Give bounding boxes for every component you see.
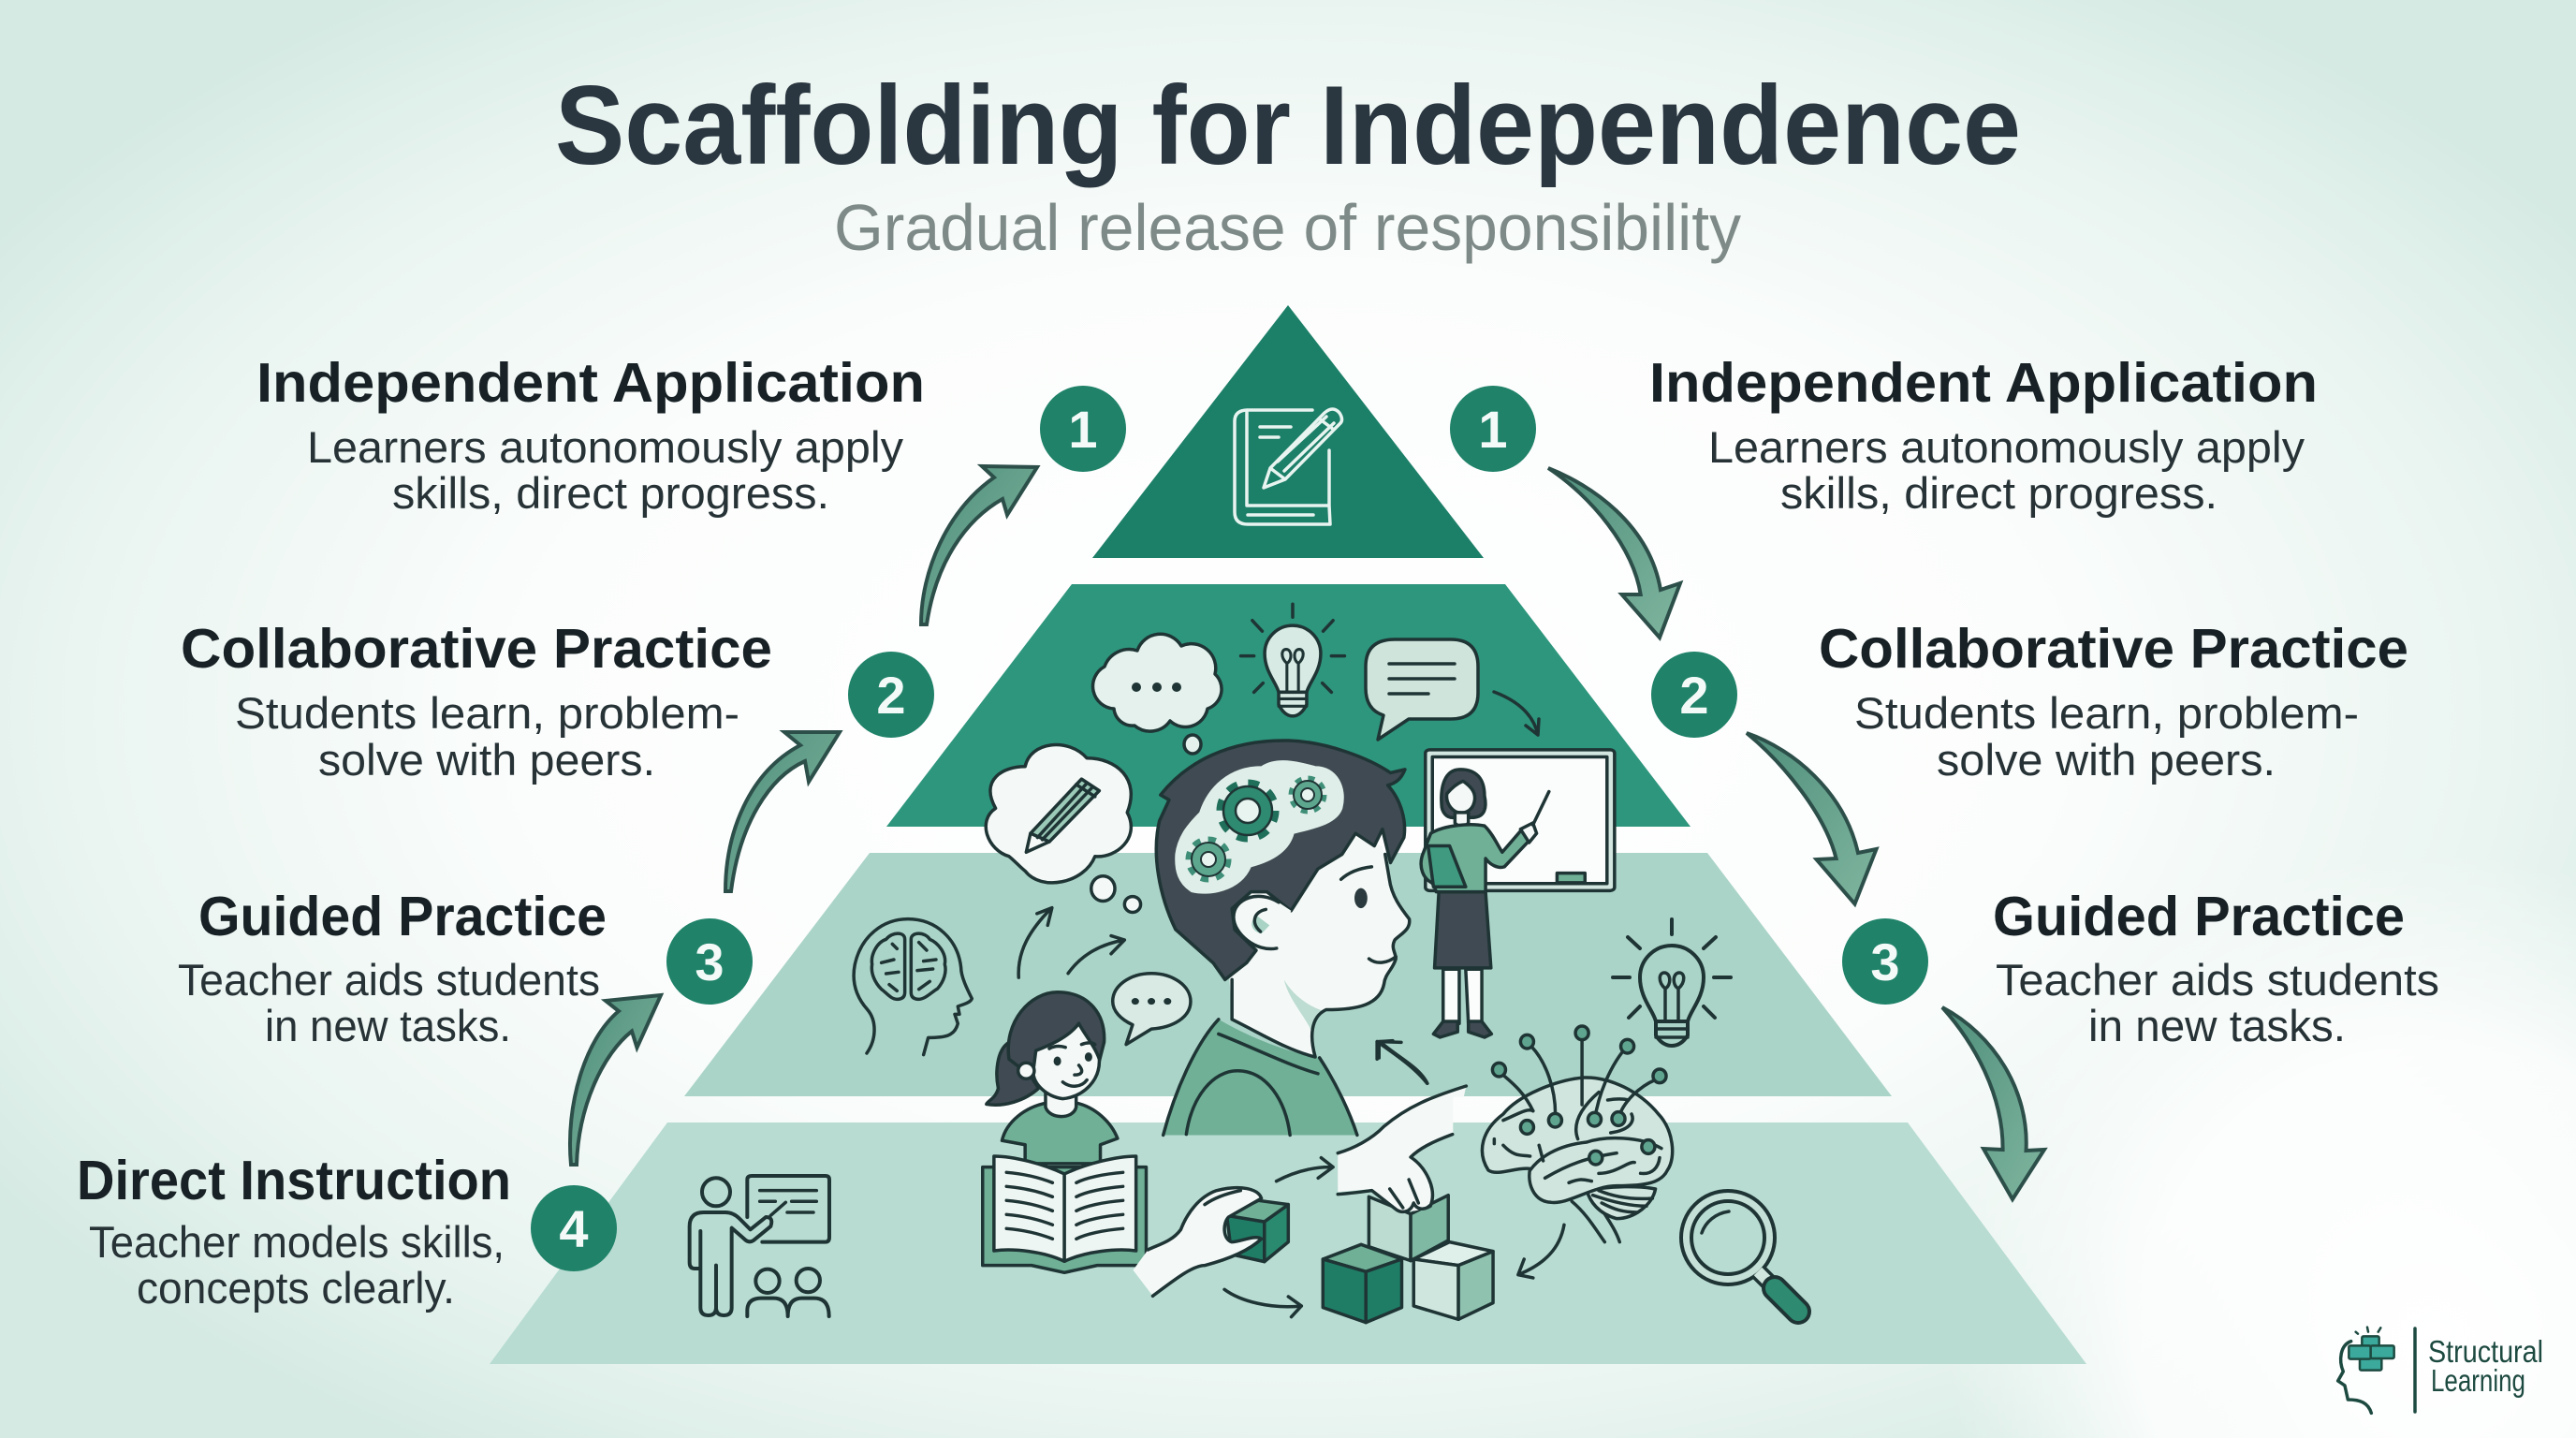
illustration: girl reading: [987, 992, 1118, 1164]
icon: speech bubble with lines: [1366, 639, 1478, 740]
number badge: 4: [531, 1185, 617, 1271]
pyramid: [490, 305, 2086, 1364]
number badge: left 3: [666, 918, 753, 1005]
icon: teacher with students: [690, 1176, 829, 1316]
title: Scaffolding for Independence: [555, 63, 2021, 188]
scene traced group: [986, 741, 1615, 1164]
icon: lower gear: [1189, 840, 1228, 879]
illustration: whiteboard: [1426, 750, 1615, 890]
illustration: held block: [1227, 1200, 1288, 1262]
number badge: 4: 4: [559, 1199, 589, 1258]
left label: guided practice: Guided Practice: [198, 886, 607, 947]
left label: direct instruction: Direct Instruction: [77, 1150, 511, 1211]
icon: large gear: [1221, 784, 1275, 838]
number badge: right 2: [1651, 652, 1737, 738]
number badge: left 1: [1040, 386, 1126, 472]
illustration: boy with gears in head: [1156, 741, 1410, 1135]
right label: guided practice: in new tasks.: [2088, 1001, 2346, 1050]
left label: independent application: [256, 352, 925, 518]
right label: collaborative practice: Students learn, problem-: [1854, 688, 2359, 738]
left label: direct instruction: [77, 1150, 511, 1313]
icon: small speech bubble: [1113, 974, 1191, 1045]
number badge: right 3: 3: [1870, 932, 1900, 991]
tier 1: independent application: [1092, 305, 1484, 558]
subtitle: Gradual release of responsibility: [834, 191, 1741, 264]
illustration: stacked blocks: [1323, 1196, 1493, 1323]
right label: guided practice: Guided Practice: [1993, 886, 2405, 947]
icon: magnifying glass: [1681, 1191, 1798, 1312]
arrow: flow to thought cloud: [1018, 908, 1052, 977]
left label: independent application: Learners autonomously apply: [307, 422, 904, 472]
icon: light bulb on tier 3: [1613, 919, 1731, 1046]
arrow: flow to boy: [1068, 936, 1124, 974]
left label: collaborative practice: solve with peers.: [318, 735, 655, 785]
arrow: right 3 down: [1942, 1007, 2044, 1199]
icon: pencil: [1026, 779, 1099, 852]
right label: collaborative practice: solve with peers.: [1937, 735, 2276, 785]
left label: collaborative practice: Students learn, problem-: [235, 688, 739, 738]
arrow: right 1 to 2: [1548, 468, 1680, 638]
arrow: right 2 to 3: [1747, 733, 1876, 904]
tier 4: direct instruction: [490, 1123, 2086, 1364]
illustration: open book: [983, 1156, 1147, 1272]
right label: independent application: Independent Application: [1649, 352, 2318, 414]
left label: direct instruction: concepts clearly.: [137, 1263, 455, 1313]
arrow: left 3 to 2: [725, 732, 840, 891]
arrow: speech to whiteboard: [1494, 692, 1539, 735]
number badge: left 1: 1: [1068, 400, 1098, 459]
logo: Structural Learning: Learning: [2431, 1363, 2525, 1398]
arrow: left 2 to 1: [921, 466, 1037, 624]
number badge: left 2: [848, 652, 934, 738]
illustration: pencil thought cloud: [986, 745, 1141, 913]
number badge: right 1: [1450, 386, 1536, 472]
icon: head with brain: [854, 919, 972, 1055]
tier 2: collaborative practice: [886, 584, 1690, 827]
number badge: left 3: 3: [695, 932, 724, 991]
icon: light bulb on tier 2: [1241, 604, 1344, 716]
right label: independent application: skills, direct progress.: [1780, 468, 2217, 518]
arrows: around blocks: [1224, 1041, 1564, 1317]
number badge: right 2: 2: [1679, 666, 1709, 725]
logo: Structural Learning: Structural: [2428, 1334, 2543, 1369]
illustration: neural brain: [1482, 1026, 1673, 1242]
left label: guided practice: in new tasks.: [265, 1001, 511, 1050]
gears in the boy's head: [1189, 779, 1324, 879]
number badge: right 1: 1: [1478, 400, 1508, 459]
right label: guided practice: Teacher aids students: [1996, 955, 2439, 1005]
icon: logo head with blocks: [2338, 1328, 2394, 1413]
right label: independent application: Learners autonomously apply: [1708, 422, 2305, 472]
left label: direct instruction: Teacher models skills,: [89, 1217, 505, 1267]
illustration: right hand placing block: [1338, 1086, 1466, 1211]
right label: independent application: [1649, 352, 2318, 518]
logo: Structural Learning: [2338, 1328, 2543, 1413]
arrow: left 4 to 3: [570, 995, 661, 1165]
right label: guided practice: [1993, 886, 2439, 1050]
right label: collaborative practice: [1819, 618, 2408, 785]
icon: small gear: [1292, 779, 1324, 811]
left label: collaborative practice: Collaborative Practice: [181, 618, 772, 680]
left label: guided practice: Teacher aids students: [178, 955, 600, 1005]
lower scene traced group: [983, 1026, 1673, 1323]
icon: book and pencil: [1235, 409, 1342, 524]
illustration: teacher at the board: [1421, 770, 1549, 1037]
number badge: right 3: [1842, 918, 1928, 1005]
right label: collaborative practice: Collaborative Practice: [1819, 618, 2408, 680]
illustration: left hand: [1133, 1188, 1262, 1296]
icon: thought cloud with dots: [1093, 634, 1222, 754]
tier 3: guided practice: [684, 853, 1892, 1096]
left label: guided practice: [178, 886, 607, 1050]
number badge: left 2: 2: [876, 666, 906, 725]
arrow: hand to boy: [1377, 1041, 1427, 1083]
left label: collaborative practice: [181, 618, 772, 785]
left label: independent application: Independent Application: [256, 352, 925, 414]
left label: independent application: skills, direct progress.: [392, 468, 829, 518]
